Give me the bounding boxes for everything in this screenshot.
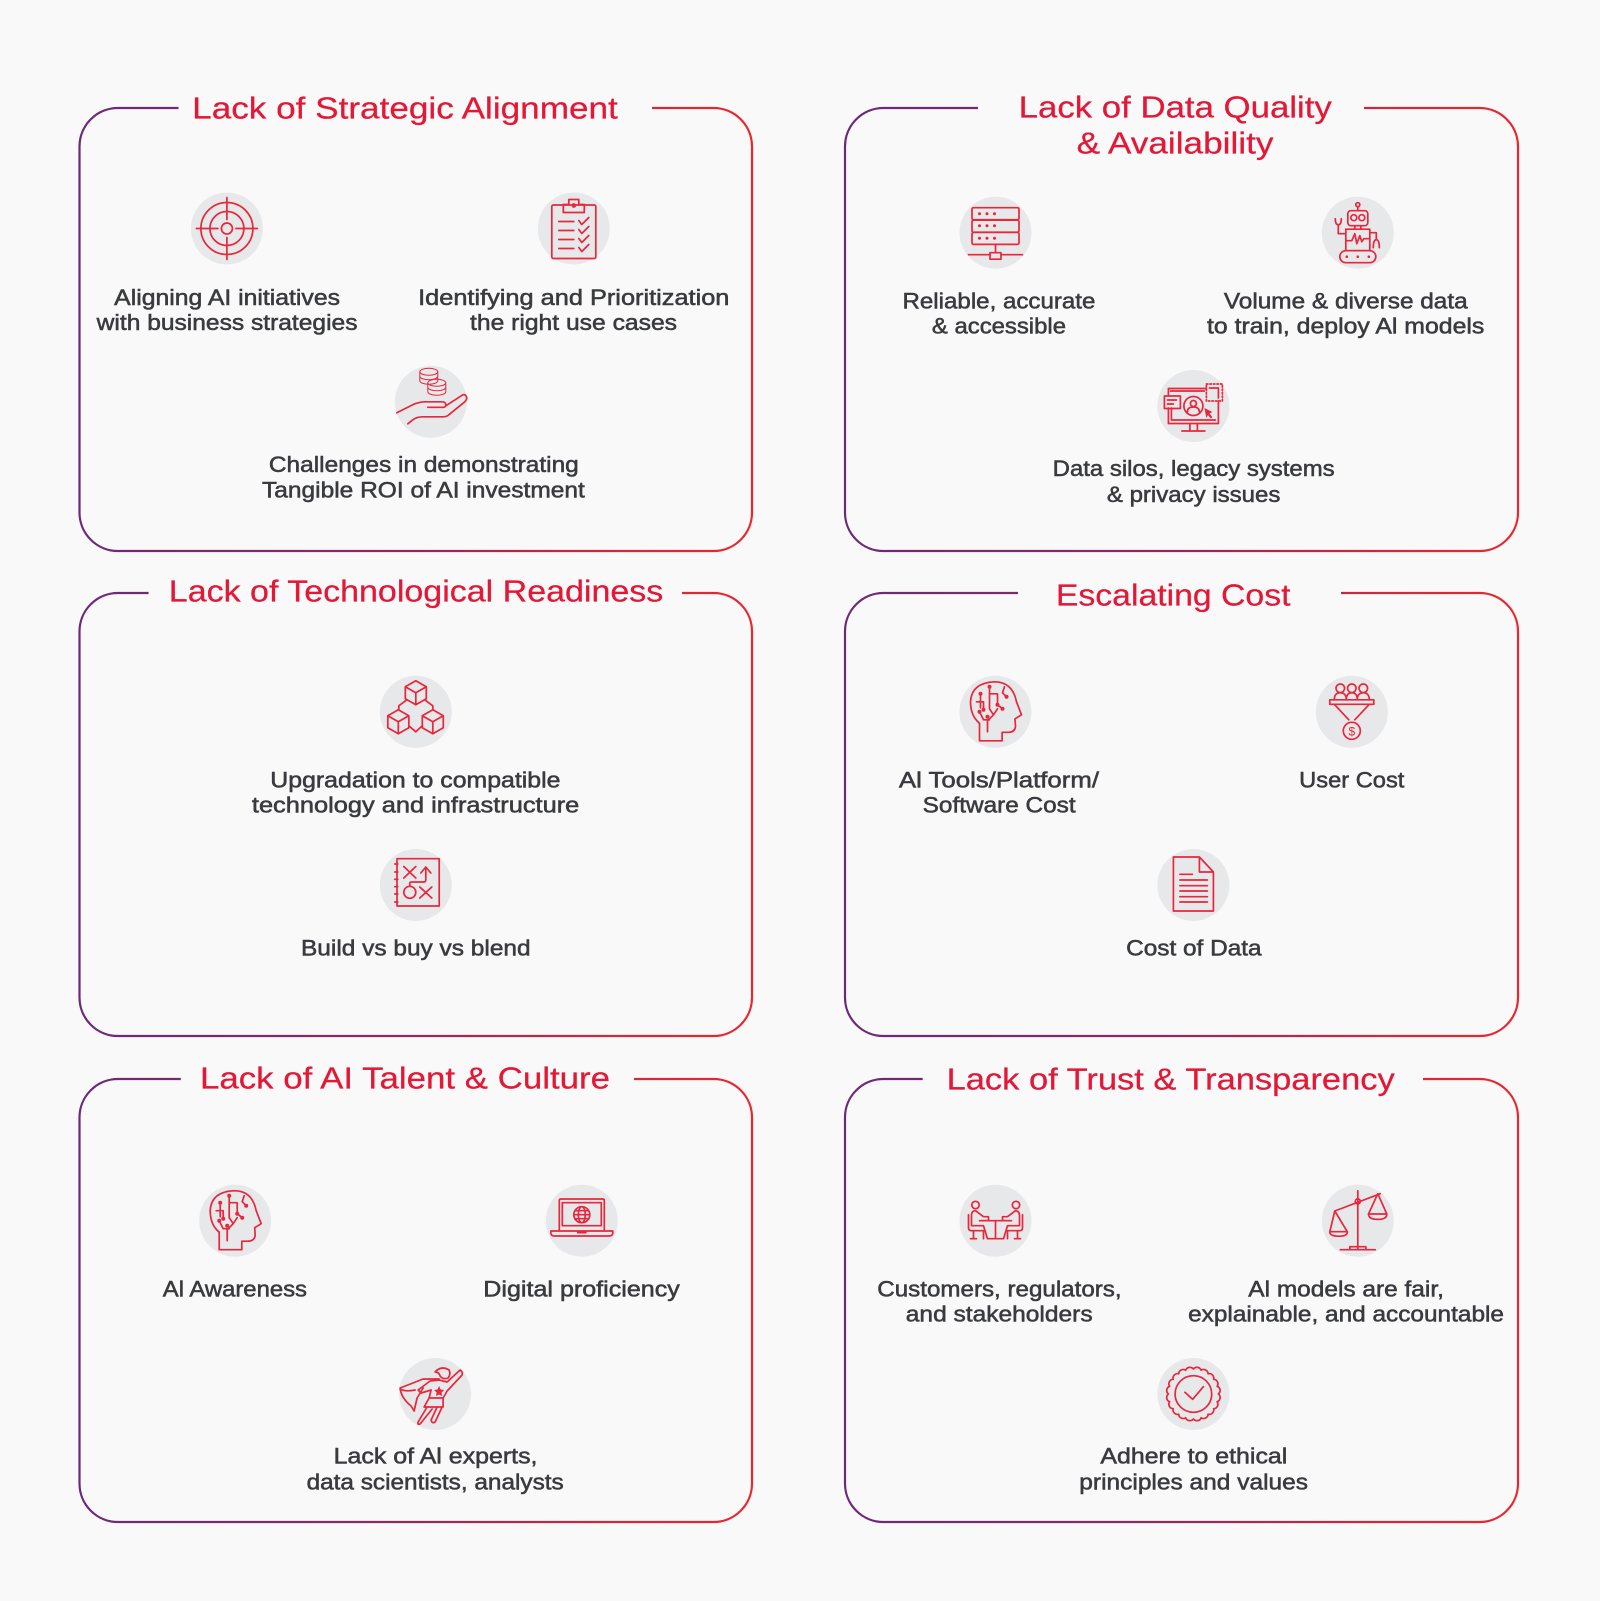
heading: & Availability xyxy=(1077,125,1274,160)
icon: AI head xyxy=(199,1185,271,1257)
item: identifying use cases xyxy=(418,192,729,335)
label: Aligning AI initiatives xyxy=(114,285,340,310)
label: Data silos, legacy systems xyxy=(1053,456,1335,481)
label: Al models are fair, xyxy=(1248,1277,1444,1302)
label: Build vs buy vs blend xyxy=(301,935,531,960)
item: lack of AI experts xyxy=(307,1358,564,1494)
heading: Lack of AI Talent & Culture xyxy=(200,1060,610,1095)
item: aligning AI initiatives xyxy=(96,192,358,335)
icon: people funnel with dollar: $ xyxy=(1348,724,1355,738)
label xyxy=(899,768,1100,818)
heading: Lack of Data Quality xyxy=(1019,89,1332,124)
panel border xyxy=(80,1079,752,1522)
item: cost of data xyxy=(1126,849,1262,960)
heading: Lack of Trust & Transparency xyxy=(947,1061,1395,1096)
icon: monitor with user xyxy=(1157,370,1229,442)
label: to train, deploy Al models xyxy=(1207,314,1484,339)
icon: server rack xyxy=(960,197,1032,269)
item: data silos xyxy=(1053,370,1335,507)
label: with business strategies xyxy=(96,310,358,335)
icon: people at table xyxy=(960,1185,1032,1257)
label: technology and infrastructure xyxy=(252,793,579,818)
label: Upgradation to compatible xyxy=(270,768,560,793)
heading: Lack of Technological Readiness xyxy=(169,574,663,609)
label: Cost of Data xyxy=(1126,935,1262,960)
panel border xyxy=(80,593,752,1036)
item: AI tools cost xyxy=(899,676,1100,818)
label xyxy=(252,768,579,818)
label: & accessible xyxy=(932,314,1066,339)
label xyxy=(307,1443,564,1494)
label xyxy=(1079,1443,1308,1494)
icon: target xyxy=(191,192,263,264)
label xyxy=(877,1277,1122,1327)
label: Tangible ROI of AI investment xyxy=(262,478,586,503)
label: Al Awareness xyxy=(163,1277,307,1302)
label: and stakeholders xyxy=(906,1302,1093,1327)
label xyxy=(1053,456,1335,507)
icon: seal with check xyxy=(1157,1358,1229,1430)
heading: Escalating Cost xyxy=(1056,578,1291,613)
panel border xyxy=(845,108,1518,551)
panel: Escalating Cost xyxy=(845,578,1518,1036)
label: Lack of Al experts, xyxy=(334,1443,538,1468)
label xyxy=(902,289,1095,339)
icon: AI head xyxy=(960,676,1032,748)
panel: Lack of Technological Readiness xyxy=(80,574,752,1036)
panel: Lack of Data Quality and Availability xyxy=(845,89,1518,551)
item: fair explainable accountable xyxy=(1188,1185,1504,1327)
label: Adhere to ethical xyxy=(1100,1443,1287,1468)
label: Reliable, accurate xyxy=(902,289,1095,314)
item: reliable data xyxy=(902,197,1095,339)
item: ethical principles xyxy=(1079,1358,1308,1494)
label: Volume & diverse data xyxy=(1224,289,1468,314)
label xyxy=(96,285,358,335)
icon: balance scales xyxy=(1322,1185,1394,1257)
item: AI awareness xyxy=(163,1185,307,1302)
heading: Lack of Strategic Alignment xyxy=(192,90,618,125)
label: explainable, and accountable xyxy=(1188,1302,1504,1327)
panel border xyxy=(80,108,752,551)
label: & privacy issues xyxy=(1107,482,1280,507)
item: upgradation xyxy=(252,676,579,818)
label: Customers, regulators, xyxy=(877,1277,1122,1302)
panel: Lack of AI Talent and Culture xyxy=(80,1060,752,1522)
icon: laptop with globe xyxy=(546,1185,618,1257)
panel border xyxy=(845,593,1518,1036)
label: principles and values xyxy=(1079,1469,1308,1494)
icon: robot xyxy=(1322,197,1394,269)
item: customers regulators stakeholders xyxy=(877,1185,1122,1327)
label: data scientists, analysts xyxy=(307,1469,564,1494)
label: Challenges in demonstrating xyxy=(269,452,579,477)
label: Identifying and Prioritization xyxy=(418,285,729,310)
icon: flying superhero xyxy=(399,1358,471,1430)
heading xyxy=(1019,89,1332,160)
label xyxy=(1188,1277,1504,1327)
item: digital proficiency xyxy=(483,1185,681,1302)
label xyxy=(418,285,729,335)
item: tangible ROI xyxy=(262,366,586,503)
label: Software Cost xyxy=(923,793,1076,818)
item: volume and diverse data xyxy=(1207,197,1484,339)
icon: document xyxy=(1157,849,1229,921)
icon: connected cubes xyxy=(380,676,452,748)
item: build vs buy vs blend xyxy=(301,849,531,960)
icon: strategy notebook xyxy=(380,849,452,921)
panel: Lack of Strategic Alignment xyxy=(80,90,752,551)
label: the right use cases xyxy=(470,310,677,335)
label: User Cost xyxy=(1299,768,1405,793)
icon: clipboard checklist xyxy=(538,192,610,264)
label: Digital proficiency xyxy=(483,1277,681,1302)
item: user cost xyxy=(1299,676,1405,793)
icon: hand with coins xyxy=(395,366,467,438)
label xyxy=(262,452,586,503)
label xyxy=(1207,289,1484,339)
label: Al Tools/Platform/ xyxy=(899,768,1100,793)
panel: Lack of Trust and Transparency xyxy=(845,1061,1518,1522)
panel border xyxy=(845,1079,1518,1522)
